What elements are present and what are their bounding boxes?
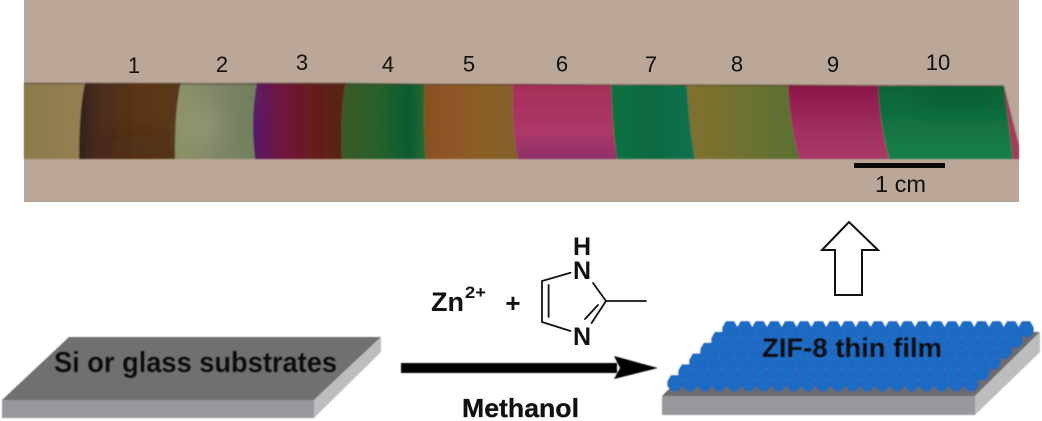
- molecule atoms: [573, 233, 591, 351]
- segment numbers: 1: [128, 53, 140, 78]
- reagent: zinc ion: [431, 283, 486, 317]
- hollow up arrow: [822, 222, 878, 295]
- colour strip with ten film segments: [24, 83, 1019, 159]
- plus sign: +: [505, 288, 521, 318]
- photo background: [24, 0, 1019, 202]
- molecule: 2-methylimidazole: [542, 233, 646, 351]
- segment numbers: 9: [827, 52, 839, 77]
- coated slab side face: [975, 332, 1040, 415]
- segment numbers: 7: [645, 52, 657, 77]
- reaction arrow: [401, 356, 658, 379]
- molecule atoms: N: [573, 323, 591, 351]
- panel: bare substrate slab: [2, 337, 381, 418]
- slab top face: [2, 337, 381, 400]
- scale bar: [854, 163, 945, 197]
- segment numbers: 6: [556, 52, 568, 76]
- coated slab front face: [662, 396, 975, 415]
- reagent: zinc ion: Zn: [431, 287, 464, 317]
- ZIF-8 crystal array: [668, 322, 1033, 391]
- coated slab top face: [662, 332, 1040, 396]
- segment numbers: 2: [216, 52, 228, 77]
- segment numbers: 5: [463, 52, 475, 76]
- segment numbers: 10: [926, 50, 950, 75]
- segment numbers: 4: [382, 52, 394, 77]
- slab side face: [314, 337, 381, 418]
- segment numbers: 8: [731, 52, 743, 76]
- film label: ZIF-8 thin film: [762, 333, 942, 363]
- scale bar: 1 cm: [875, 171, 926, 197]
- slab front face: [2, 400, 314, 418]
- molecule bonds: [542, 273, 646, 331]
- segment numbers: [128, 50, 950, 78]
- molecule atoms: H: [573, 233, 591, 261]
- reagent: zinc ion: 2+: [465, 283, 486, 302]
- panel: photograph of coloured film strip: [24, 0, 1019, 202]
- substrate label: Si or glass substrates: [54, 347, 337, 379]
- molecule atoms: N: [573, 257, 591, 285]
- strip colour variation: [117, 102, 426, 159]
- panel: ZIF-8 coated substrate: [662, 322, 1040, 415]
- segment numbers: 3: [296, 50, 308, 75]
